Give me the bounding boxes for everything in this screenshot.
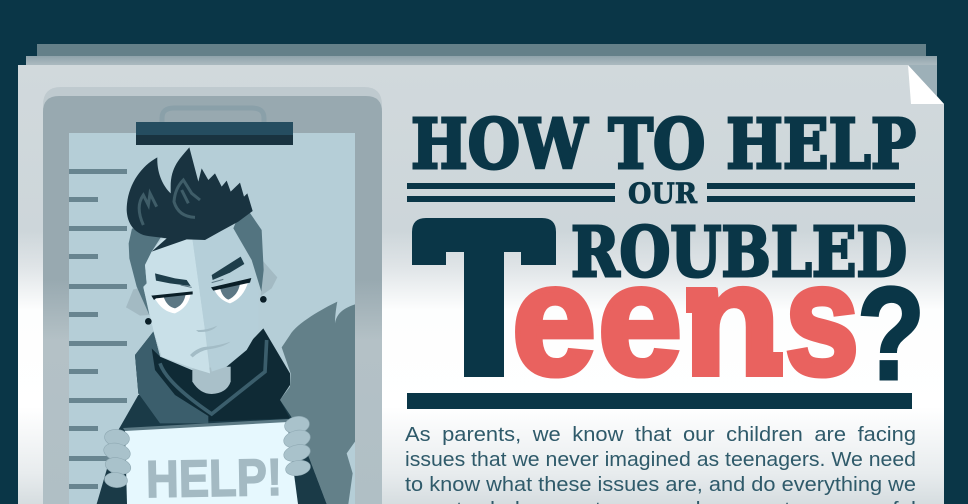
middle paper sheet <box>26 56 937 96</box>
jacket <box>97 395 327 504</box>
earrings <box>145 296 267 325</box>
head <box>126 203 277 373</box>
title line: our with rules <box>407 177 915 210</box>
nose <box>196 326 217 332</box>
title word: eens <box>512 232 859 408</box>
hood left band <box>135 332 208 423</box>
nose and mouth <box>190 326 231 357</box>
right eye <box>211 278 251 303</box>
mouth <box>190 342 231 357</box>
face left half <box>143 233 210 373</box>
jacket, hood, neck <box>97 328 327 504</box>
hair highlights <box>139 180 200 225</box>
height ruler <box>69 169 127 489</box>
intro paragraph <box>405 424 916 504</box>
title line: how to help: HOW TO HELP <box>411 105 916 185</box>
eyebrow creases <box>181 279 223 287</box>
title underline bar <box>407 393 912 409</box>
hood inner <box>135 328 290 423</box>
intro paragraph: to know what these issues are, and do everything we <box>405 474 916 496</box>
n slab serifs <box>686 287 783 377</box>
large letter T <box>412 218 556 377</box>
left hand <box>102 428 133 489</box>
sign board <box>125 421 298 504</box>
spiked hair <box>127 147 253 252</box>
left eye <box>151 291 193 313</box>
intro paragraph: As parents, we know that our children are facing <box>405 424 916 446</box>
intro paragraph: issues that we never imagined as teenagers. We need <box>405 449 916 471</box>
title word: eens: n <box>684 232 780 408</box>
teen figure <box>97 147 355 504</box>
help sign held by teen <box>102 414 312 504</box>
back paper sheet <box>37 44 926 74</box>
clipboard body <box>43 96 382 504</box>
eyebrows <box>155 257 244 286</box>
side hair <box>129 203 264 315</box>
shadow of hair and shoulder <box>280 302 355 504</box>
title line: our with rules: OUR <box>628 177 698 210</box>
sign top shadow <box>123 419 288 431</box>
title word: eens: e <box>598 232 682 408</box>
clipboard top edge <box>43 87 382 504</box>
title line: roubled: ROUBLED <box>571 213 907 293</box>
question mark: ? <box>857 260 925 407</box>
clip bar <box>136 122 293 145</box>
folded paper corner <box>908 65 944 104</box>
right hand <box>282 414 312 478</box>
clipboard <box>43 87 382 504</box>
title word: eens: s <box>785 232 859 408</box>
title <box>407 105 925 408</box>
clip handle <box>162 108 264 124</box>
hood strip <box>160 340 267 414</box>
face right half <box>192 228 258 372</box>
ears <box>126 261 277 316</box>
neck <box>192 367 231 394</box>
title word: eens: e <box>512 232 596 408</box>
mugshot backdrop <box>69 133 355 504</box>
